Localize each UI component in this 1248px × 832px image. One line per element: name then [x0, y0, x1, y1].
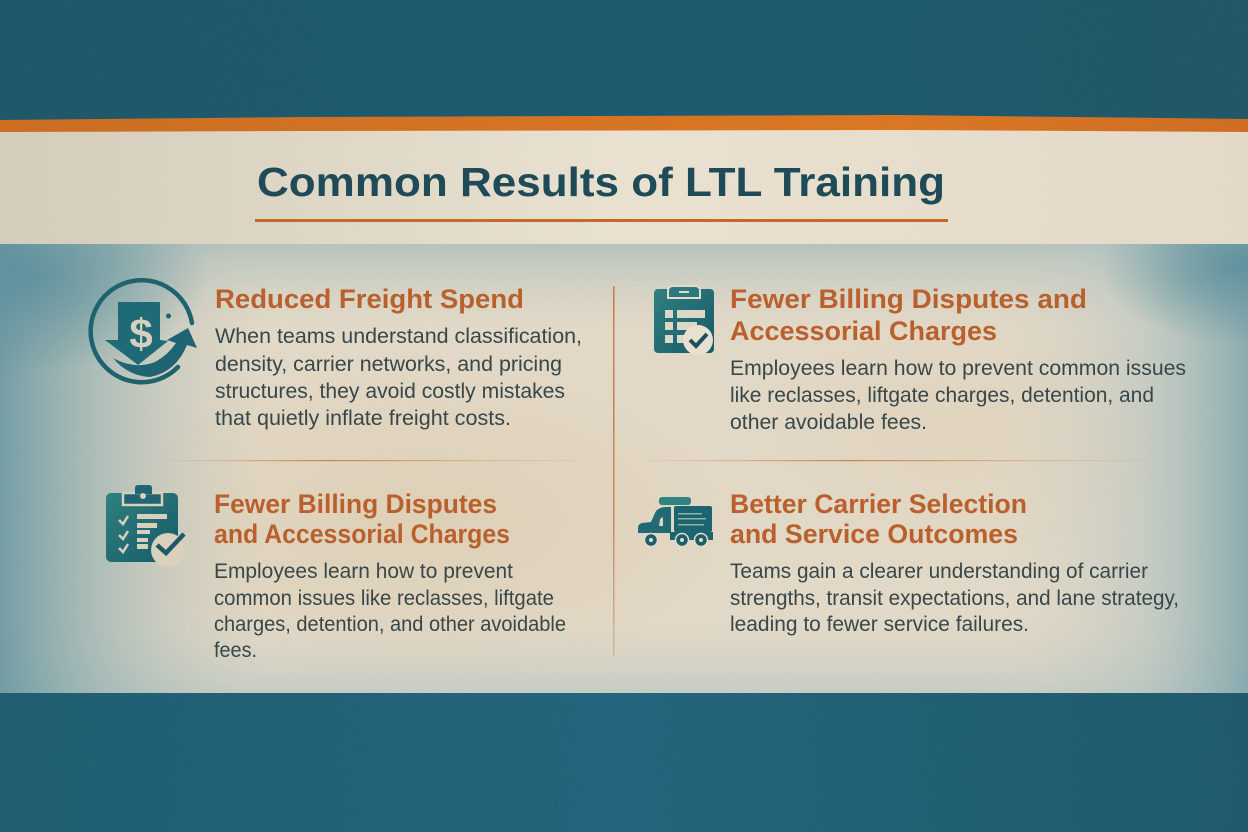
orange stripe: [0, 115, 1248, 132]
panel: fewer billing disputes, bottom left: [106, 485, 566, 662]
body text: that quietly inflate freight costs.: [215, 407, 511, 430]
title underline: [255, 219, 948, 222]
body text: structures, they avoid costly mistakes: [215, 380, 565, 403]
body text: Employees learn how to prevent common issues: [730, 357, 1186, 380]
bottom teal band: [0, 693, 1248, 832]
vertical divider: [613, 286, 614, 657]
body text: density, carrier networks, and pricing: [215, 353, 562, 376]
icon: dollar down arrow in circular arrow: $: [129, 310, 153, 357]
body text: other avoidable fees.: [730, 411, 927, 434]
heading: Better Carrier Selection: [730, 489, 1027, 519]
heading: and Accessorial Charges: [214, 519, 510, 549]
icon: dollar down arrow in circular arrow: [91, 280, 197, 382]
heading: [730, 284, 1087, 346]
panel: reduced freight spend: [91, 280, 582, 430]
heading: [730, 489, 1027, 549]
heading: and Service Outcomes: [730, 519, 1018, 549]
cream title band background: [0, 128, 1248, 244]
body text: fees.: [214, 639, 257, 662]
body text: charges, detention, and other avoidable: [214, 613, 566, 636]
heading: Reduced Freight Spend: [215, 284, 524, 314]
heading: Accessorial Charges: [730, 316, 997, 346]
title: Common Results of LTL Training: [257, 159, 945, 205]
mottled content panel background: [0, 244, 1248, 693]
icon: clipboard with table and check: [654, 286, 714, 355]
panel: fewer billing disputes, top right: [654, 284, 1186, 434]
left horizontal divider: [160, 460, 580, 461]
body text: common issues like reclasses, liftgate: [214, 587, 554, 610]
body text: When teams understand classification,: [215, 325, 582, 348]
body text: Teams gain a clearer understanding of carrier: [730, 560, 1148, 583]
body text: [730, 357, 1186, 434]
heading: [214, 489, 510, 549]
top teal band: [0, 0, 1248, 122]
icon: clipboard with checklist and check: [106, 485, 185, 567]
body text: leading to fewer service failures.: [730, 613, 1029, 636]
right horizontal divider: [648, 460, 1153, 461]
body text: [730, 560, 1179, 636]
icon: delivery truck: [638, 497, 713, 546]
body text: Employees learn how to prevent: [214, 560, 513, 583]
body text: strengths, transit expectations, and lane strategy,: [730, 587, 1179, 610]
body text: [215, 325, 582, 430]
panel: better carrier selection: [638, 489, 1179, 636]
body text: like reclasses, liftgate charges, detention, and: [730, 384, 1154, 407]
heading: Fewer Billing Disputes and: [730, 284, 1087, 314]
heading: Fewer Billing Disputes: [214, 489, 497, 519]
body text: [214, 560, 566, 662]
